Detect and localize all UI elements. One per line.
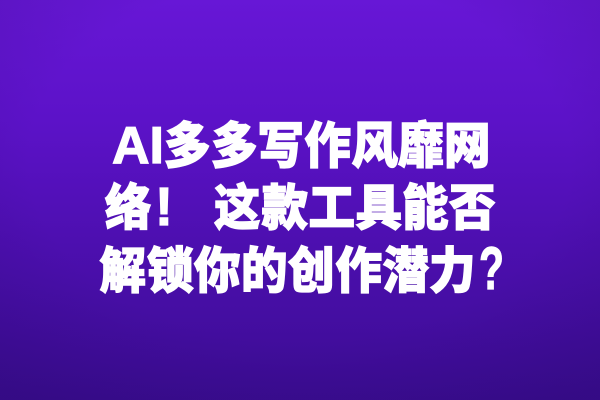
title: [100, 117, 504, 302]
title line 2: !: [155, 177, 173, 237]
title line 3: ?: [479, 235, 504, 302]
title line 2: 这款工具能否: [214, 182, 496, 236]
title line 1: AI: [112, 117, 164, 175]
title line 1: 多多写作风靡网: [164, 120, 490, 174]
title line 2: 络: [105, 182, 151, 236]
title line 2: [105, 177, 496, 237]
title line 3: 解锁你的创作潜力: [100, 245, 475, 299]
